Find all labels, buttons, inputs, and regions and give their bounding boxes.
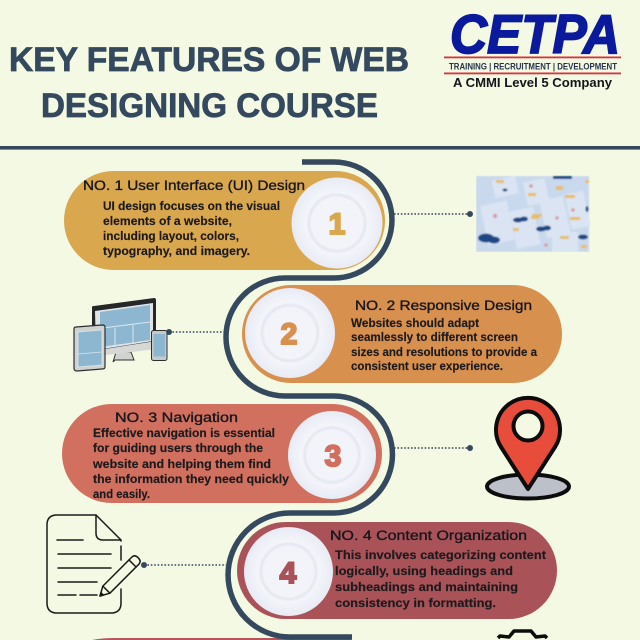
heading: NO. 3 Navigation — [115, 410, 238, 425]
description: elements of a website, — [103, 216, 232, 228]
number badge: 4 — [280, 557, 297, 590]
pencil — [96, 554, 142, 600]
description: sizes and resolutions to provide a — [351, 347, 538, 359]
description: Effective navigation is essential — [93, 428, 275, 440]
logo: CETPA — [444, 3, 621, 90]
icon: location pin — [487, 398, 569, 498]
description: for guiding users through the — [93, 443, 263, 455]
connector 2 — [166, 329, 225, 335]
winding path — [226, 162, 392, 637]
description — [351, 318, 538, 373]
header divider — [0, 146, 640, 150]
description: subheadings and maintaining — [335, 582, 518, 594]
pill background — [64, 171, 385, 270]
number badge — [288, 411, 376, 499]
description: typography, and imagery. — [103, 246, 250, 258]
description: seamlessly to different screen — [351, 332, 518, 344]
panel: feature 3 — [62, 404, 382, 503]
icon: document and pencil — [47, 515, 142, 613]
logo: CETPA: CETPA — [450, 3, 620, 65]
description: Websites should adapt — [351, 318, 479, 330]
connector 4 — [141, 562, 226, 568]
heading: NO. 2 Responsive Design — [355, 298, 532, 313]
description: website and helping them find — [92, 459, 271, 471]
pill background — [242, 285, 562, 383]
description — [335, 550, 546, 610]
panel: feature 5 pill (cropped) — [92, 638, 352, 640]
connector 1 — [394, 211, 473, 217]
phone — [152, 330, 167, 360]
heading: NO. 1 User Interface (UI) Design — [83, 178, 305, 193]
number badge — [244, 527, 333, 616]
description: This involves categorizing content — [335, 550, 546, 562]
pill background — [62, 404, 382, 503]
description: UI design focuses on the visual — [103, 201, 280, 213]
description: logically, using headings and — [335, 566, 513, 578]
title: DESIGNING COURSE — [41, 87, 378, 125]
tablet — [74, 325, 105, 371]
icon: UI mockups photo — [476, 176, 591, 252]
number badge: 2 — [281, 318, 297, 351]
title: KEY FEATURES OF WEB — [9, 41, 409, 79]
description: consistent user experience. — [351, 361, 503, 373]
logo: CETPA: A CMMI Level 5 Company — [453, 75, 613, 90]
connector 3 — [394, 445, 473, 451]
number badge: 3 — [325, 440, 341, 473]
description: the information they need quickly — [93, 474, 290, 486]
description: consistency in formatting. — [335, 598, 496, 610]
description: and easily. — [93, 489, 150, 501]
heading: NO. 4 Content Organization — [330, 528, 527, 543]
pill background — [237, 522, 557, 619]
description — [103, 201, 280, 258]
icon: gear (cropped) — [498, 631, 547, 638]
panel: feature 2 — [242, 285, 562, 383]
number badge — [245, 288, 335, 378]
description: including layout, colors, — [103, 231, 239, 243]
description — [92, 428, 290, 501]
title — [9, 41, 409, 125]
panel: feature 1 — [64, 171, 385, 270]
monitor — [92, 298, 156, 362]
number badge: 1 — [329, 208, 345, 241]
panel: feature 4 — [237, 522, 557, 619]
icon: responsive devices — [74, 298, 167, 371]
number badge — [292, 178, 382, 268]
